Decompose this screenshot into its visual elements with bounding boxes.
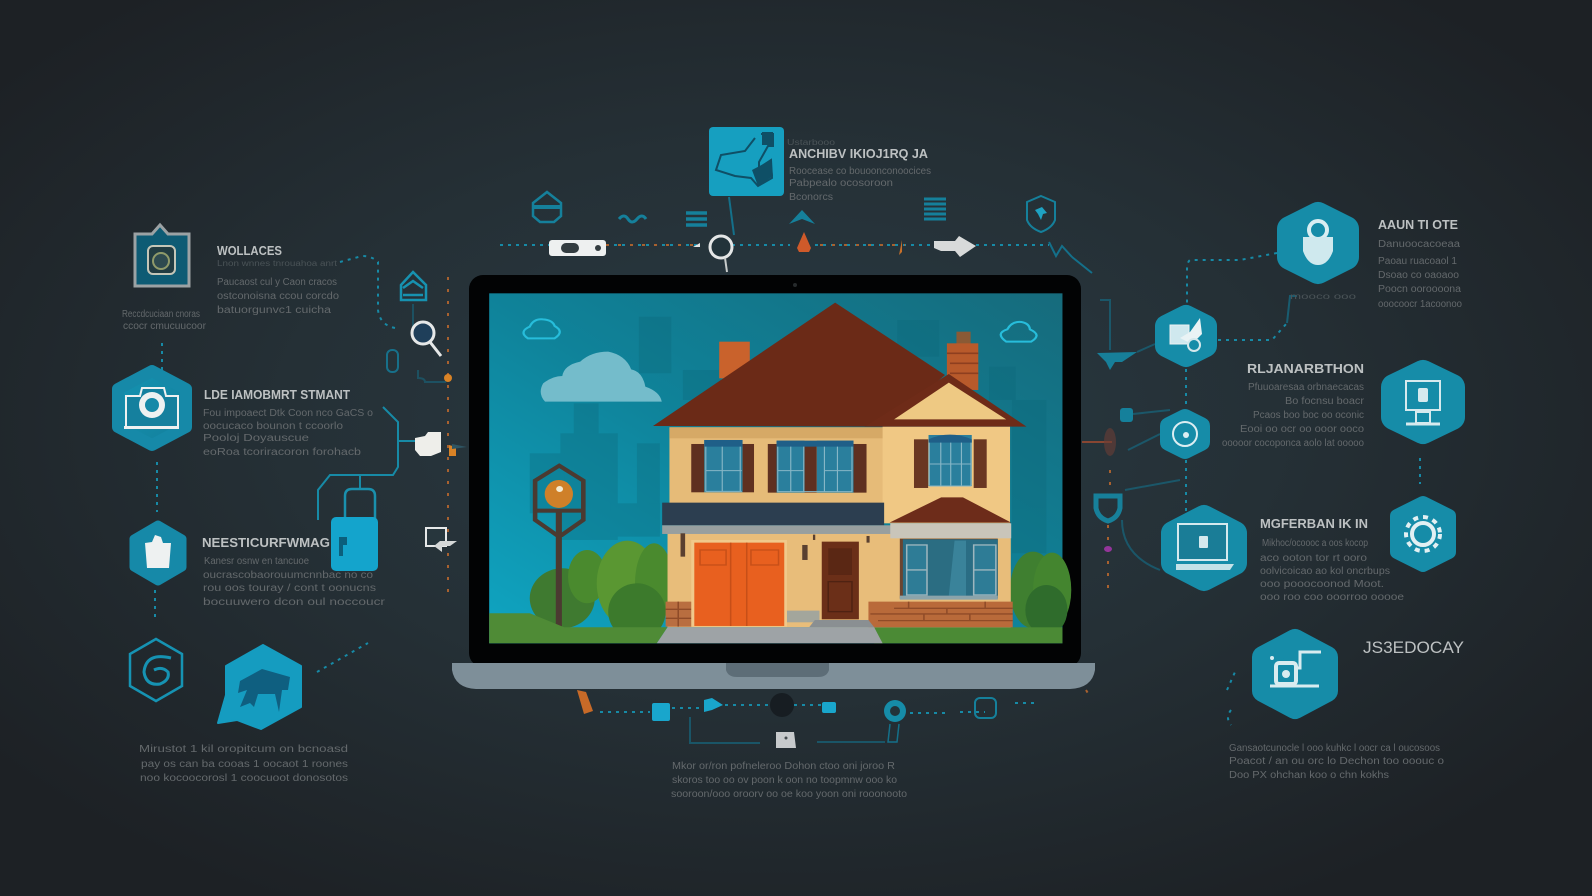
panel: spiral and table — [130, 639, 348, 784]
icon: check tile circle — [1166, 316, 1206, 356]
brick base left — [666, 602, 692, 627]
text block — [203, 408, 373, 458]
garage door — [691, 540, 787, 627]
text block: Pcaos boo boc oo oconic — [1253, 410, 1364, 421]
hexagon laptop icon — [1173, 517, 1235, 579]
heading: JS3EDOCAY — [1363, 638, 1464, 657]
panel: smart camera — [118, 371, 373, 458]
text block: noo kocoocorosl 1 coocuoot donosotos — [140, 773, 348, 784]
porch canopy — [662, 503, 884, 525]
panel: robot feature — [1222, 361, 1452, 449]
city silhouette — [530, 317, 1046, 553]
panel: jsedocay — [1229, 638, 1464, 781]
heading: AAUN TI OTE — [1378, 217, 1458, 232]
icon: small teal square — [1120, 408, 1133, 422]
text block — [1229, 743, 1445, 781]
text block — [1378, 239, 1462, 310]
icon: white pill — [549, 240, 606, 256]
text block: Paucaost cul y Caon cracos — [217, 277, 337, 288]
text block: Danuoocacoeaa — [1378, 239, 1460, 250]
text block — [217, 259, 339, 316]
icon: purple marker — [1104, 546, 1112, 552]
icon: white document — [776, 732, 796, 748]
text block: rou oos touray / cont t oonucns — [203, 583, 376, 594]
caption: mooco ooo — [1290, 292, 1357, 301]
panel: right circle icons — [1096, 316, 1206, 552]
text block: oolvicoicao ao kol oncrbups — [1260, 566, 1390, 577]
text block: Lnon wnnes tnrouahoa anrt — [217, 259, 338, 268]
icon: outline hexagon spiral — [130, 639, 182, 701]
chimney left — [719, 342, 750, 378]
laptop notch — [726, 663, 829, 677]
icon: squiggle — [619, 216, 646, 222]
bottom text block: Mkor or/ron pofneleroo Dohon ctoo oni joroo R — [672, 761, 895, 772]
hexagon hand icon — [134, 525, 182, 581]
icon: shield — [1027, 196, 1055, 232]
heading: LDE IAMOBMRT STMANT — [204, 387, 350, 402]
icon: table badge — [218, 645, 301, 729]
text block: Bconorcs — [789, 192, 833, 203]
chimney right — [947, 332, 978, 390]
icon: orange glow — [1104, 428, 1116, 456]
icon: padlock — [331, 489, 378, 571]
foundation strip — [787, 611, 819, 622]
panel: lock feature — [1290, 215, 1462, 310]
icon: stripes — [924, 199, 946, 219]
text block: Pooloj Doyauscue — [203, 433, 310, 444]
main roof — [653, 303, 945, 427]
caption: Reccdcuciaan cnoras — [122, 309, 200, 320]
front door — [822, 542, 859, 619]
gable roof — [865, 374, 1026, 427]
upper wall right — [883, 427, 1010, 523]
text block: ooocoocr 1acoonoo — [1378, 299, 1462, 310]
bushes left — [530, 541, 673, 640]
icon: dark circle — [770, 693, 794, 717]
upper window right — [914, 435, 987, 488]
text block: Kanesr osnw en tancuoe — [204, 556, 309, 567]
text block: oucrascobaorouumcnnbac no co — [203, 570, 374, 581]
text block: Pabpealo ocosoroon — [789, 178, 893, 189]
icon: cyan circle tag — [884, 700, 906, 742]
text block: Bo focnsu boacr — [1285, 396, 1365, 407]
hexagon lock icon — [1290, 215, 1346, 271]
screen scene — [489, 293, 1071, 643]
icon: tool tile — [709, 127, 784, 196]
wall lamps — [681, 533, 870, 560]
text block: aco ooton tor rt ooro — [1260, 553, 1368, 564]
text block: Poacot / an ou orc lo Dechon too ooouc o — [1229, 756, 1445, 767]
hexagon camera icon — [118, 371, 186, 445]
large cloud — [541, 352, 662, 402]
text block: ooo pooocoonod Moot. — [1260, 579, 1384, 590]
bottom text block: sooroon/ooo oroorv oo oe koo yoon oni rooonooto — [671, 789, 907, 800]
text block: oocucaco bounon t ccoorlo — [203, 421, 344, 432]
icon: teal house — [401, 272, 426, 300]
text block: batuorgunvc1 cuicha — [217, 305, 332, 316]
bottom icon row — [577, 690, 996, 748]
bay cornice — [890, 523, 1011, 538]
text block: Eooi oo ocr oo ooor ooco — [1240, 424, 1364, 435]
icon: teal badge — [533, 192, 561, 222]
icon: small outline lock — [387, 350, 398, 372]
panel: wollaces — [122, 225, 339, 332]
text block: Paoau ruacoaol 1 — [1378, 256, 1457, 267]
side icons left — [387, 272, 467, 552]
icon: stacked bars — [686, 213, 707, 225]
icon: orange triangle — [577, 690, 593, 714]
heading: NEESTICURFWMAG — [202, 535, 330, 550]
icon: ring — [693, 236, 732, 272]
orange pin — [899, 240, 902, 255]
text block: ostconoisna ccou corcdo — [217, 291, 339, 302]
text block — [139, 744, 348, 784]
panel: needs configuration — [134, 489, 386, 608]
upper wall left — [669, 427, 883, 503]
icon: cyan block — [822, 702, 836, 713]
text block: Gansaotcunocle l ooo kuhkc l oocr ca l oucosoos — [1229, 743, 1440, 754]
bottom text block: skoros too oo ov poon k oon no toopmnw ooo ko — [672, 775, 897, 786]
gable fill — [894, 383, 1006, 419]
grass right — [874, 627, 1062, 643]
icon: cyan tile — [652, 703, 670, 721]
text block: ooo roo coo ooorroo ooooe — [1260, 592, 1405, 603]
text block — [1222, 382, 1365, 449]
eyebrow: Ustarbooo — [787, 138, 836, 147]
laptop — [452, 275, 1095, 689]
text block: ooooor cocoponca aolo lat ooooo — [1222, 438, 1364, 449]
hexagon gear icon — [1397, 503, 1449, 565]
top icon row — [533, 192, 1055, 272]
icon: white arrow — [934, 236, 976, 257]
hexagon tool icon — [1263, 640, 1327, 708]
text block — [1260, 538, 1405, 603]
outline cloud left — [523, 319, 560, 338]
icon: cursor tile — [426, 528, 457, 552]
icon: outline badge — [975, 698, 996, 718]
orange marker bottom — [449, 445, 456, 456]
panel: top feature — [709, 127, 931, 203]
bottom text block — [671, 761, 907, 800]
icon: framed camera — [135, 225, 189, 286]
ground floor wall — [668, 533, 1011, 627]
text block: Doo PX ohchan koo o chn kokhs — [1229, 770, 1389, 781]
icon: magnifier — [412, 322, 441, 356]
laptop base — [452, 663, 1095, 689]
panel: laptop feature — [1173, 503, 1449, 603]
outline cloud right — [1001, 322, 1037, 342]
text block: Pfuuoaresaa orbnaecacas — [1248, 382, 1364, 393]
caption: ccocr cmucuucoor — [123, 321, 207, 332]
text block: pay os can ba cooas 1 oocaot 1 roones — [141, 759, 348, 770]
camera dot — [793, 283, 797, 287]
caption — [122, 309, 207, 332]
hexagon monitor icon — [1394, 373, 1452, 431]
text block: Mirustot 1 kil oropitcum on bcnoasd — [139, 744, 348, 755]
text block: Roocease co bouoonconoocices — [789, 166, 931, 177]
icon: teal pointer — [452, 444, 467, 449]
icon: orange drop — [797, 232, 811, 252]
bay roof — [889, 497, 1011, 523]
upper window middle pair — [768, 441, 867, 493]
icon: gauge circle — [1169, 418, 1201, 450]
text block — [789, 166, 931, 203]
text block: eoRoa tcoriracoron forohacb — [203, 447, 362, 458]
text block: bocuuwero dcon oul noccoucr — [203, 597, 386, 608]
connector lines and dotted paths — [155, 197, 1420, 743]
laptop bezel — [469, 275, 1081, 667]
street lamp — [535, 466, 583, 627]
orange marker top — [444, 374, 452, 382]
icon: white glove — [415, 432, 441, 456]
icon: teal bird — [1097, 352, 1137, 370]
text block: Fou impoaect Dtk Coon nco GaCS o — [203, 408, 373, 419]
text block — [203, 556, 386, 608]
front steps — [809, 620, 874, 627]
heading: WOLLACES — [217, 243, 282, 258]
text block: Dsoao co oaoaoo — [1378, 270, 1459, 281]
text block: Poocn ooroooona — [1378, 284, 1461, 295]
grass left — [489, 613, 668, 643]
icon: up arrow — [789, 210, 815, 224]
heading: RLJANARBTHON — [1247, 361, 1364, 376]
bay window — [900, 539, 998, 600]
text block: Mikhoc/ocoooc a oos kocop — [1262, 538, 1368, 549]
icon: shield clasp — [1096, 496, 1120, 521]
sky — [489, 293, 1062, 643]
icon: cyan blob — [704, 698, 723, 712]
brick base right — [868, 602, 1013, 627]
bushes right — [1010, 552, 1071, 635]
upper window left — [691, 440, 754, 492]
heading: MGFERBAN IK IN — [1260, 516, 1368, 531]
driveway — [657, 627, 883, 643]
heading: ANCHIBV IKIOJ1RQ JA — [789, 146, 929, 161]
